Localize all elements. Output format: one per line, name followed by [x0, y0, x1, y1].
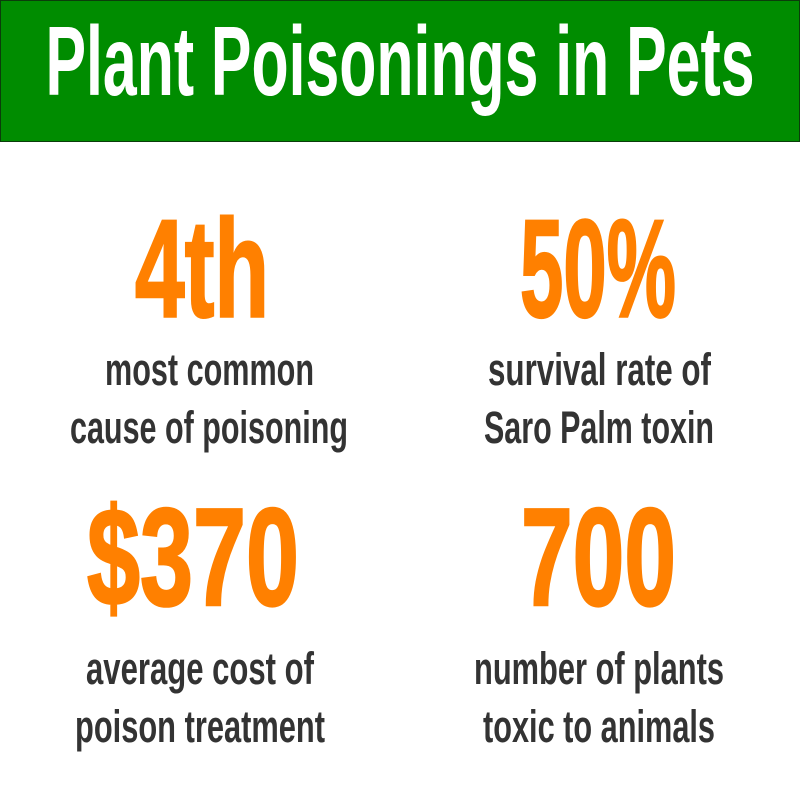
- stat: 700 plants toxic: [474, 480, 724, 752]
- stat: 50% survival rate: survival rate of: [488, 344, 712, 395]
- stat: 50% survival rate: 50%: [520, 192, 676, 346]
- stat: $370 average cost: $370: [87, 480, 299, 635]
- stat: $370 average cost: average cost of: [86, 643, 315, 694]
- stat: 4th most common cause: cause of poisoning: [70, 402, 348, 453]
- stat: 700 plants toxic: 700: [521, 480, 676, 635]
- stat: 4th most common cause: 4th: [135, 192, 269, 346]
- stat: $370 average cost: [75, 480, 325, 752]
- stat: 50% survival rate: [484, 192, 714, 453]
- stat: 4th most common cause: most common: [105, 344, 314, 395]
- title banner: [0, 0, 800, 142]
- stat: $370 average cost: poison treatment: [75, 701, 325, 752]
- stat: 4th most common cause: [70, 192, 348, 453]
